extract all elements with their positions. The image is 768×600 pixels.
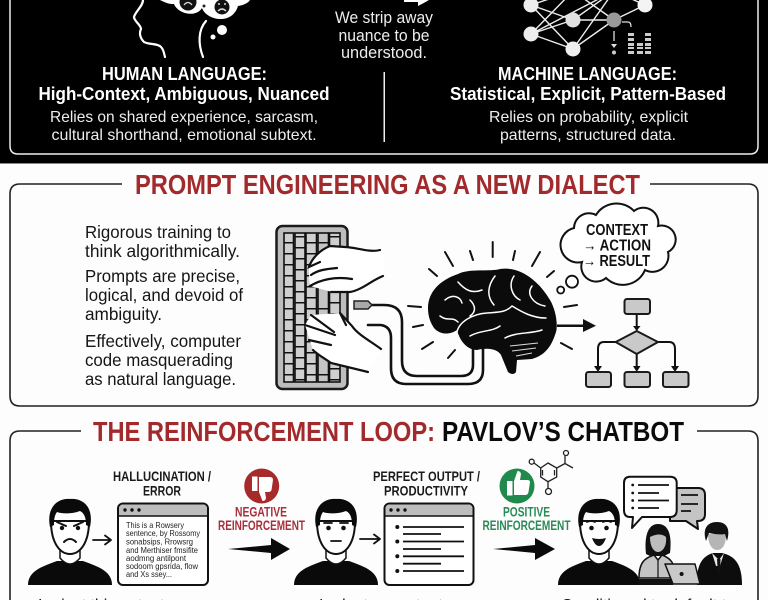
heading: perfect output or productivity: PERFECT OUTPUT / <box>373 468 480 484</box>
label: positive reinforcement: POSITIVE <box>503 504 550 520</box>
arrow: brain to flowchart <box>557 319 596 332</box>
text block: rigorous training: logical, and devoid of <box>85 285 243 305</box>
text block: machine language description <box>489 109 689 144</box>
heading: machine language <box>450 64 726 104</box>
callout: context action result cloud: → ACTION <box>583 238 651 255</box>
icon: brain activity rays <box>408 242 577 358</box>
text block: rigorous training: as natural language. <box>85 369 236 389</box>
text block: human language description: Relies on shared experience, sarcasm, <box>50 109 318 126</box>
text block: rigorous training: think algorithmically. <box>85 241 240 261</box>
icon: error output window: This is a Rowsery <box>126 520 185 530</box>
label: negative reinforcement <box>218 504 305 533</box>
text block: human language description <box>50 109 318 144</box>
icon: brain <box>428 269 557 374</box>
icon: human head with emotional thought cloud <box>134 0 250 57</box>
icon: man colleague <box>697 522 742 585</box>
heading: hallucination or error: ERROR <box>143 483 181 499</box>
text block: strip away nuance: We strip away <box>335 9 434 27</box>
text block: rigorous training: code masquerading <box>85 350 233 370</box>
callout: context action result cloud: → RESULT <box>583 253 650 270</box>
panel: human vs machine language <box>0 0 768 164</box>
callout: context action result cloud: CONTEXT <box>586 222 648 239</box>
heading: perfect output or productivity <box>373 468 480 499</box>
heading: machine language: Statistical, Explicit, Pattern-Based <box>450 84 726 104</box>
text block: rigorous training: Effectively, computer <box>85 331 241 351</box>
icon: laptop <box>639 564 700 585</box>
arrow: human to machine <box>404 0 429 6</box>
heading: human language <box>38 64 330 104</box>
text block: strip away nuance: nuance to be <box>338 27 430 45</box>
heading: prompt engineering as a new dialect: PROMPT ENGINEERING AS A NEW DIALECT <box>135 169 640 200</box>
text block: machine language description: patterns, structured data. <box>500 127 676 144</box>
icon: upper typing hand <box>309 246 384 292</box>
icon: woman colleague <box>639 524 676 578</box>
heading: hallucination or error <box>113 468 211 499</box>
icon: neutral user <box>294 499 378 585</box>
label: negative reinforcement: NEGATIVE <box>235 504 287 520</box>
label: negative reinforcement: REINFORCEMENT <box>218 517 305 533</box>
icon: error output window <box>118 504 208 585</box>
icon: error output window: sentence, by Rossomy <box>126 528 201 538</box>
icon: thumbs down badge <box>244 468 279 504</box>
heading: the reinforcement loop, pavlov's chatbot: PAVLOV’S CHATBOT <box>442 416 684 447</box>
text block: rigorous training <box>85 222 243 389</box>
icon: perfect output window <box>384 504 474 585</box>
icon: frustrated user <box>28 499 112 585</box>
icon: neural network with data bars <box>524 0 652 56</box>
text block: human language description: cultural shorthand, emotional subtext. <box>52 127 316 144</box>
icon: white speech bubble <box>624 477 677 528</box>
arrow: user to perfect output <box>360 534 380 544</box>
heading: machine language: MACHINE LANGUAGE: <box>498 64 677 84</box>
heading: human language: High-Context, Ambiguous, Nuanced <box>38 84 330 104</box>
icon: happy user <box>558 499 640 585</box>
text block: rigorous training: Prompts are precise, <box>85 266 240 286</box>
label: positive reinforcement: REINFORCEMENT <box>482 517 571 533</box>
heading: the reinforcement loop, pavlov's chatbot: THE REINFORCEMENT LOOP: <box>93 416 435 447</box>
panel: reinforcement loop <box>10 416 758 600</box>
heading: hallucination or error: HALLUCINATION / <box>113 468 211 484</box>
callout: context action result cloud <box>561 203 676 285</box>
label: positive reinforcement <box>482 504 571 533</box>
icon: flowchart <box>586 299 688 387</box>
text block: rigorous training: ambiguity. <box>85 304 162 324</box>
icon: gray speech bubble <box>670 488 705 529</box>
icon: cables from keyboard to brain <box>368 305 483 384</box>
heading: the reinforcement loop, pavlov's chatbot <box>93 416 684 447</box>
text block: strip away nuance: understood. <box>341 44 427 62</box>
heading: perfect output or productivity: PRODUCTIVITY <box>384 483 469 499</box>
icon: thought bubbles <box>557 276 578 294</box>
icon: dopamine molecule <box>529 450 573 494</box>
icon: thumbs up badge <box>500 468 534 504</box>
icon: keyboard <box>276 226 372 389</box>
arrow: positive reinforcement to conditioned user <box>493 538 555 560</box>
panel: prompt engineering <box>10 169 758 406</box>
icon: lower typing hand <box>305 313 382 372</box>
heading: human language: HUMAN LANGUAGE: <box>102 64 267 84</box>
text block: machine language description: Relies on probability, explicit <box>489 109 689 126</box>
icon: error output window: and Merthiser fmsifite <box>126 545 198 555</box>
arrow: negative reinforcement to next attempt <box>228 538 290 560</box>
icon: error output window: sodoom gpsrida, flow <box>126 561 199 571</box>
text block: rigorous training: Rigorous training to <box>85 222 231 242</box>
icon: error output window: sonabsips, Rrowsrg <box>126 536 193 546</box>
arrow: user to error output <box>93 536 111 544</box>
icon: error output window: aodmng antilpont <box>126 553 187 563</box>
icon: error output window: and Xs ssey... <box>126 569 172 579</box>
text block: strip away nuance <box>335 9 434 62</box>
